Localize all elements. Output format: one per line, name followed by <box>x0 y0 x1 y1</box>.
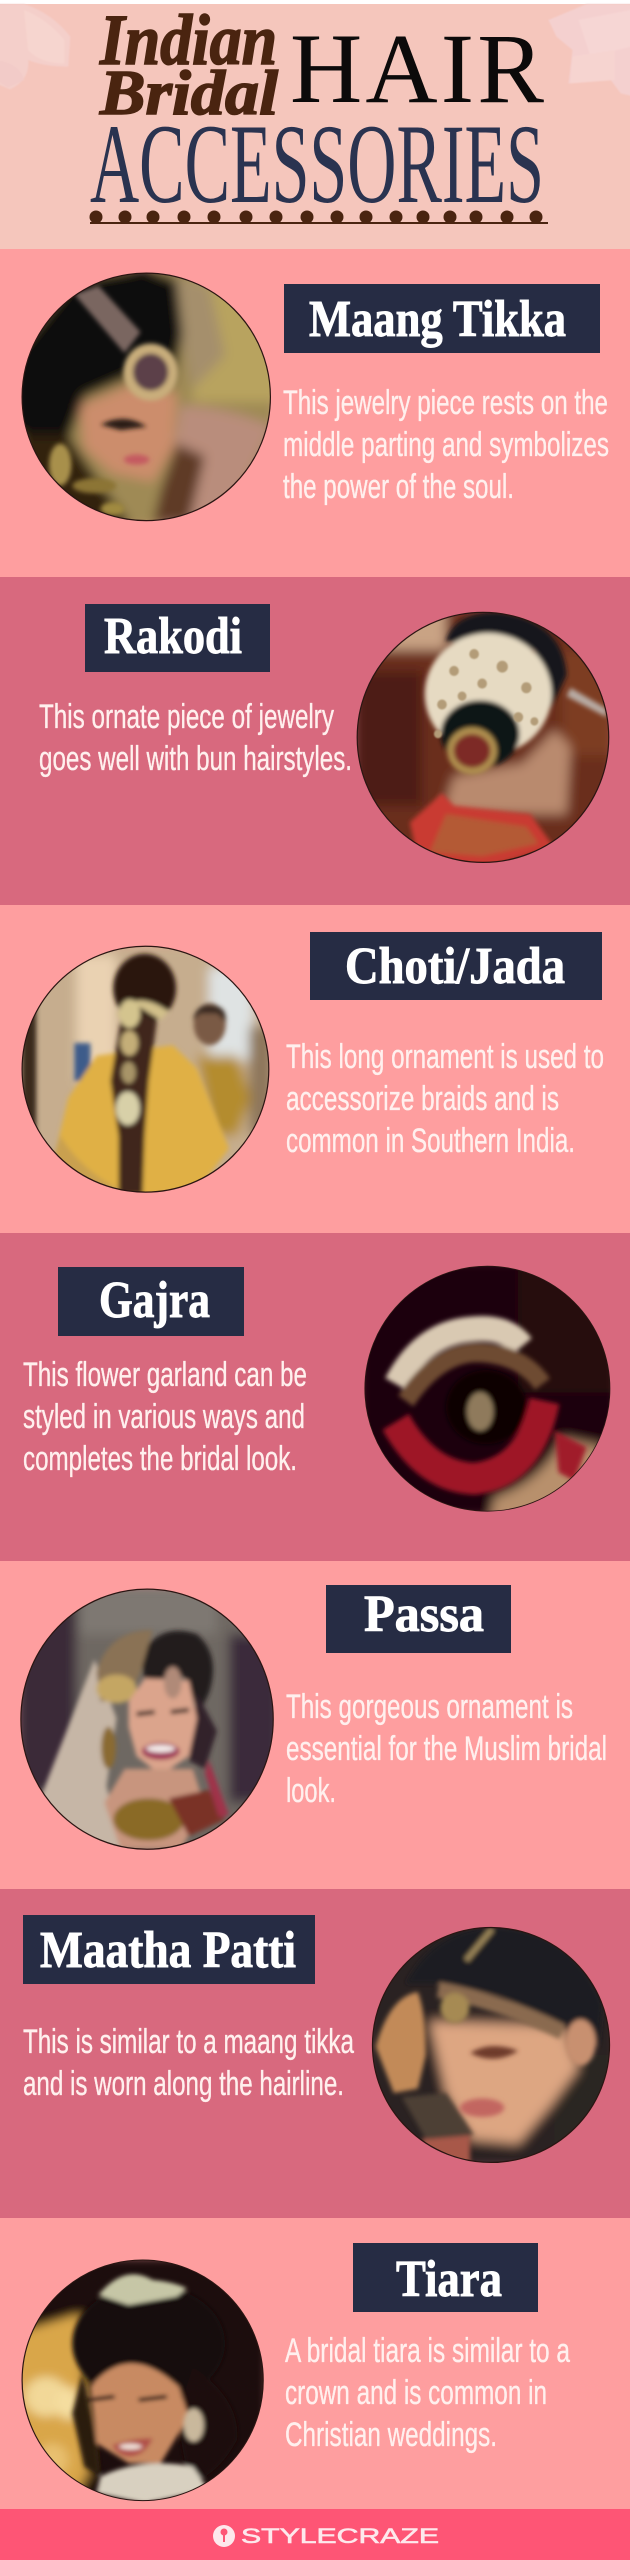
header panel <box>0 0 630 227</box>
photo: maang tikka bride <box>22 272 271 522</box>
icon: lotus right <box>548 4 630 97</box>
heading label: Maang Tikka <box>309 291 566 348</box>
brand name: STYLECRAZE <box>241 2525 439 2548</box>
description <box>286 1038 604 1160</box>
dotted underline <box>90 210 548 224</box>
panel: Gajra <box>23 1258 619 1519</box>
heading label: Choti/Jada <box>345 938 565 995</box>
description: styled in various ways and <box>23 1398 305 1436</box>
description: This is similar to a maang tikka <box>23 2023 354 2061</box>
description: This flower garland can be <box>23 1356 307 1394</box>
description: and is worn along the hairline. <box>23 2065 344 2103</box>
heading label: Gajra <box>99 1272 210 1329</box>
photo: maatha patti bride <box>372 1926 610 2163</box>
title: Indian Bridal <box>99 0 278 128</box>
description: completes the bridal look. <box>23 1440 297 1478</box>
description <box>286 1688 607 1810</box>
description: the power of the soul. <box>283 468 514 506</box>
photo: tiara bride <box>16 2257 269 2507</box>
panel: Tiara <box>16 2243 570 2507</box>
description: This ornate piece of jewelry <box>39 698 334 736</box>
description: goes well with bun hairstyles. <box>39 740 352 778</box>
photo: rakodi bun <box>354 608 615 869</box>
heading label: Maatha Patti <box>40 1922 296 1979</box>
description <box>285 2332 570 2454</box>
photo: gajra garland <box>364 1266 610 1512</box>
description <box>39 698 352 778</box>
heading label <box>353 2243 538 2312</box>
description <box>283 384 609 506</box>
panel: Maang Tikka <box>12 267 609 528</box>
photo: passa bride <box>16 1584 281 1853</box>
heading label <box>58 1267 244 1336</box>
panel: Passa <box>16 1584 607 1853</box>
heading label: Tiara <box>396 2251 502 2308</box>
icon: stylecraze logo <box>213 2525 235 2547</box>
description <box>23 1356 307 1478</box>
title: Indian Bridal: Indian <box>99 0 277 80</box>
title: HAIR: HAIR <box>290 13 544 124</box>
panel: Maatha Patti <box>23 1915 619 2169</box>
description: look. <box>286 1772 336 1810</box>
footer <box>0 2509 630 2560</box>
heading label <box>326 1585 511 1653</box>
heading label: Rakodi <box>104 608 242 665</box>
icon: lotus left <box>0 4 70 89</box>
panel: Choti/Jada <box>16 932 604 1199</box>
title: Indian Bridal: Bridal <box>99 57 278 128</box>
description <box>23 2023 354 2103</box>
description: Christian weddings. <box>285 2416 497 2454</box>
heading label: Passa <box>364 1586 484 1643</box>
panel: Rakodi <box>39 604 615 869</box>
photo: choti braid <box>16 942 277 1199</box>
